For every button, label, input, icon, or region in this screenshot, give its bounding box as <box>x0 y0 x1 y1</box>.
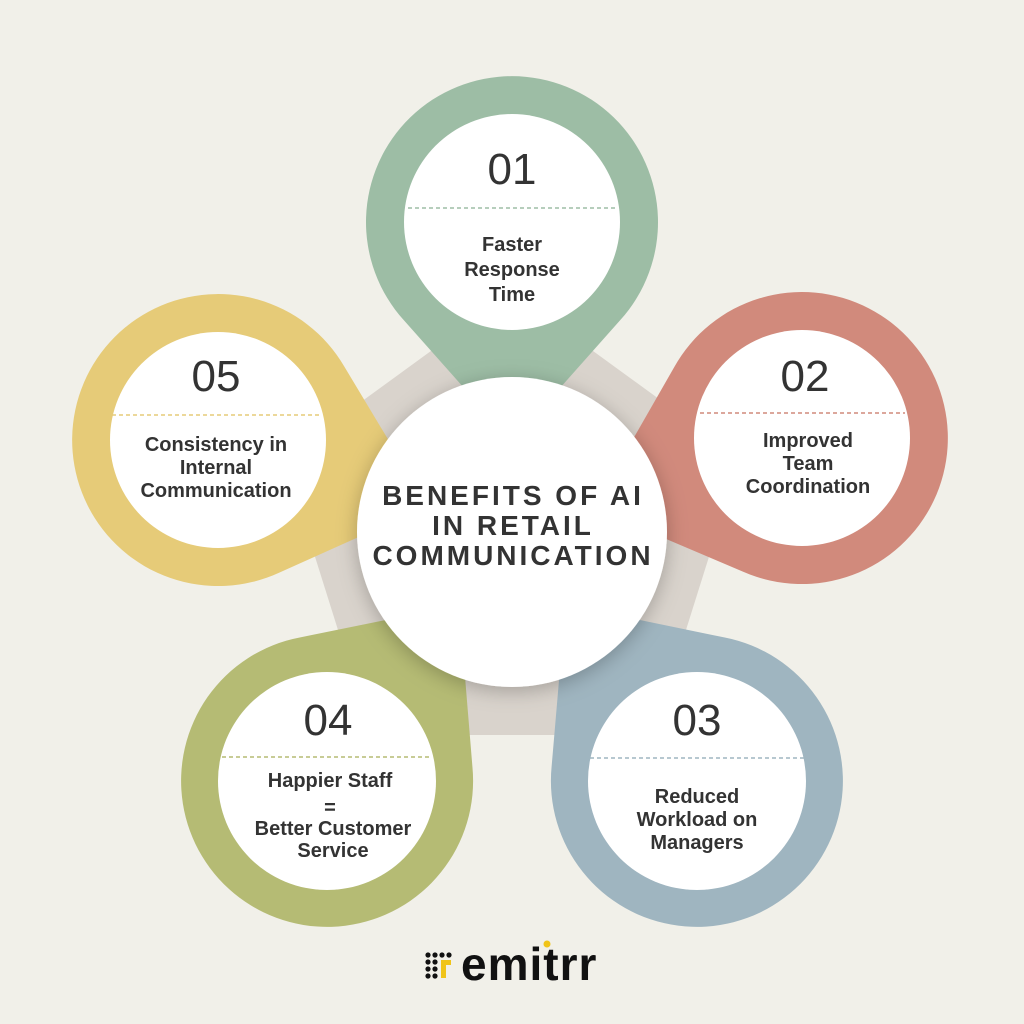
drop 04: 04 <box>304 696 352 745</box>
drop 03 <box>448 517 901 985</box>
center circle title <box>357 377 667 687</box>
center circle title: COMMUNICATION <box>372 540 654 571</box>
drop 04 <box>123 517 576 985</box>
drop 03: Managers <box>650 832 744 854</box>
drop 02: Coordination <box>746 476 870 498</box>
drop 01 <box>366 76 658 442</box>
pentagon backdrop <box>284 292 740 735</box>
drop 05 <box>35 257 472 645</box>
center circle title: IN RETAIL <box>432 510 594 541</box>
drop 01: Time <box>489 284 535 306</box>
drop 02: Improved <box>763 430 853 452</box>
drop 02: 02 <box>781 352 829 401</box>
drop 02: Team <box>783 453 833 475</box>
drop 03: Workload on <box>637 809 757 831</box>
drop 04: Service <box>297 840 369 862</box>
drop 05: Communication <box>140 480 292 502</box>
drop 04: = <box>324 797 336 819</box>
drop 03: 03 <box>673 696 721 745</box>
center circle title: BENEFITS OF AI <box>382 480 644 511</box>
drop 04: Happier Staff <box>268 770 393 792</box>
logo: emitrr: emitrr <box>461 938 597 990</box>
drop 01: Faster <box>482 234 542 256</box>
drop 01: Response <box>464 259 560 281</box>
drop 05: 05 <box>192 352 240 401</box>
drop 03: Reduced <box>655 786 739 808</box>
drop 01: 01 <box>488 145 536 194</box>
drop 02 <box>547 253 987 647</box>
drop 05: Internal <box>180 457 252 479</box>
drop 05: Consistency in <box>145 434 287 456</box>
drop 04: Better Customer <box>255 818 412 840</box>
